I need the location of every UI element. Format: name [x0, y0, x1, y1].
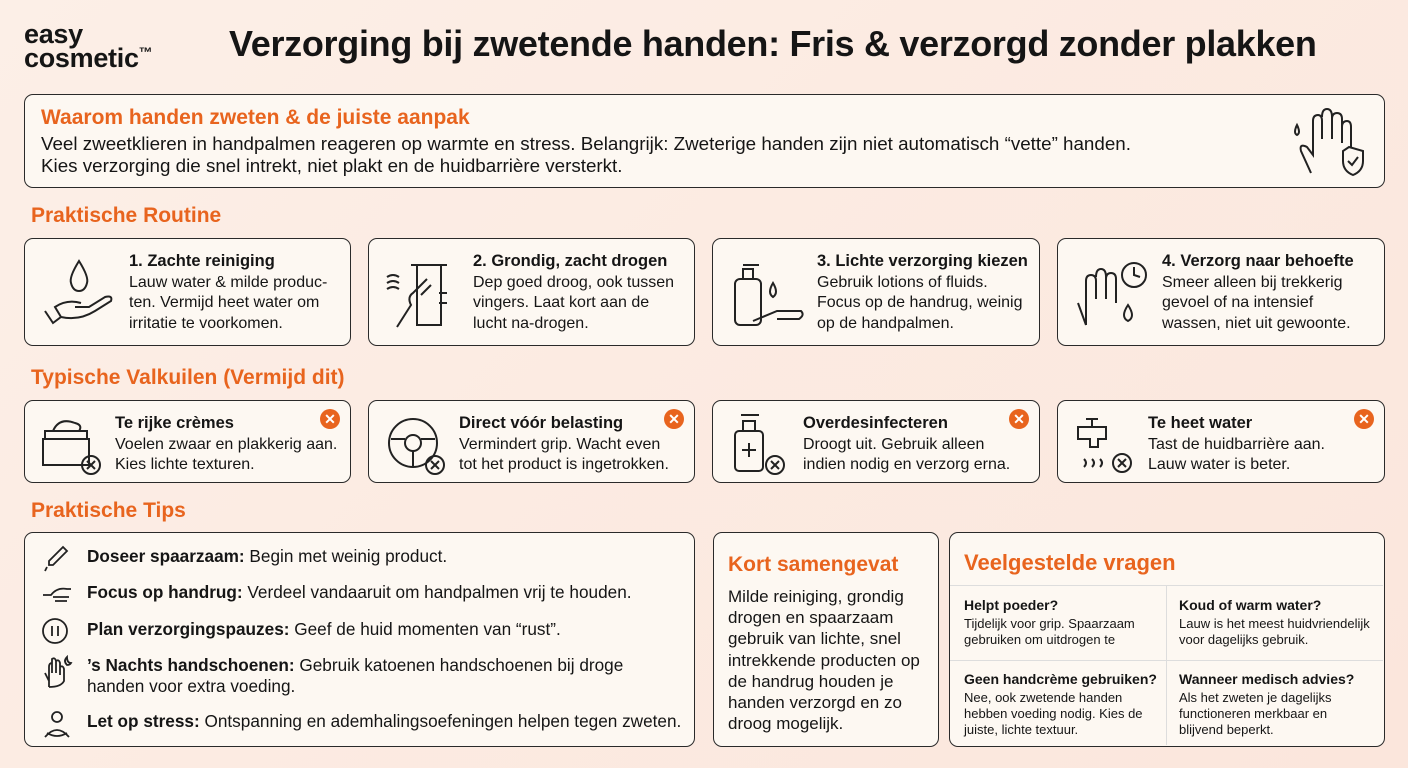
icon: steering wheel — [388, 418, 445, 475]
faq 3: juiste, lichte textuur. — [964, 722, 1078, 737]
text: vingers. Laat kort aan de — [473, 294, 649, 311]
text — [459, 414, 669, 473]
text — [1148, 414, 1325, 473]
faq 3: hebben voeding nodig. Kies de — [964, 706, 1143, 721]
panel: tips: handen voor extra voeding. — [87, 676, 295, 696]
logo: cosmetic™ — [24, 43, 152, 73]
text: Overdesinfecteren — [803, 414, 948, 432]
text — [803, 414, 1010, 473]
icon: x — [1354, 409, 1374, 429]
text — [129, 252, 327, 332]
logo — [24, 19, 152, 73]
panel: tips: Let op stress: Ontspanning en ademhalingsoefeningen helpen tegen zweten. — [87, 711, 681, 731]
faq 4: Als het zweten je dagelijks — [1179, 690, 1331, 705]
faq 2: Koud of warm water? — [1179, 597, 1321, 613]
faq 1: gebruiken om uitdrogen te — [964, 632, 1115, 647]
text: Vermindert grip. Wacht even — [459, 436, 660, 452]
text: Kies lichte texturen. — [115, 456, 255, 473]
text — [817, 252, 1028, 332]
text: ten. Vermijd heet water om — [129, 294, 319, 311]
text: Voelen zwaar en plakkerig aan. — [115, 436, 337, 452]
text: Gebruik lotions of fluids. — [817, 274, 988, 290]
panel: summary — [713, 532, 939, 747]
faq 3: Geen handcrème gebruiken? — [964, 671, 1157, 687]
text: Focus op de handrug, weinig — [817, 294, 1022, 311]
icon: x — [1009, 409, 1029, 429]
heading: tips: Praktische Tips — [31, 499, 186, 522]
intro heading: Waarom handen zweten & de juiste aanpak — [41, 106, 470, 129]
icon: x: ✕ — [1013, 411, 1025, 427]
logo: easy — [24, 19, 83, 49]
faq 4: Wanneer medisch advies? — [1179, 671, 1354, 687]
card: pitfall 3 — [712, 400, 1040, 483]
text: Lauw water is beter. — [1148, 456, 1290, 473]
text — [115, 414, 337, 473]
icon: cream jar — [42, 420, 101, 475]
faq 4: blijvend beperkt. — [1179, 722, 1274, 737]
text: Direct vóór belasting — [459, 414, 623, 432]
panel: faq — [949, 532, 1385, 747]
heading: pitfalls: Typische Valkuilen (Vermijd dit) — [31, 366, 345, 389]
card: routine 4 — [1057, 238, 1385, 346]
tip 1 — [44, 546, 447, 572]
faq 1: Tijdelijk voor grip. Spaarzaam — [964, 616, 1135, 631]
panel: intro — [24, 94, 1385, 188]
heading: routine: Praktische Routine — [31, 204, 221, 227]
icon: x — [320, 409, 340, 429]
faq 2 — [1179, 597, 1370, 647]
icon: hand clock — [1077, 262, 1147, 326]
text: 1. Zachte reiniging — [129, 252, 275, 270]
text: Te rijke crèmes — [115, 414, 234, 432]
text: wassen, niet uit gewoonte. — [1162, 314, 1351, 332]
faq 1 — [964, 597, 1135, 647]
intro text: Veel zweetklieren in handpalmen reageren op warmte en stress. Belangrijk: Zweterige handen zijn niet automatisch “vette” handen. — [41, 133, 1131, 154]
panel: tips: Plan verzorgingspauzes: Geef de huid momenten van “rust”. — [87, 619, 561, 639]
faq heading: Veelgestelde vragen — [964, 550, 1176, 575]
tip 2 — [43, 582, 632, 602]
text: Droogt uit. Gebruik alleen — [803, 436, 984, 452]
intro text: Kies verzorging die snel intrekt, niet plakt en de huidbarrière versterkt. — [41, 155, 622, 176]
text — [1162, 252, 1354, 332]
text: indien nodig en verzorg erna. — [803, 456, 1010, 473]
icon: hand with shield — [1294, 108, 1364, 176]
card: pitfall 2 — [368, 400, 695, 483]
icon: towel — [386, 264, 447, 328]
text: 4. Verzorg naar behoefte — [1162, 252, 1354, 270]
card: routine 3 — [712, 238, 1040, 346]
text: op de handpalmen. — [817, 314, 954, 332]
icon: lotion — [734, 264, 804, 326]
tip 4 — [44, 655, 623, 696]
card: routine 1 — [24, 238, 351, 346]
icon: drop in hand — [44, 259, 112, 324]
card: routine 2 — [368, 238, 695, 346]
panel: tips: ’s Nachts handschoenen: Gebruik katoenen handschoenen bij droge — [87, 655, 623, 675]
icon: x: ✕ — [1358, 411, 1370, 427]
tip 5 — [44, 711, 681, 738]
icon: x — [664, 409, 684, 429]
icon: tap — [1077, 418, 1132, 473]
faq 4: functioneren merkbaar en — [1179, 706, 1327, 721]
text: tot het product is ingetrokken. — [459, 456, 669, 473]
panel: tips: Focus op handrug: Verdeel vandaaruit om handpalmen vrij te houden. — [87, 582, 632, 602]
text: Tast de huidbarrière aan. — [1148, 436, 1325, 452]
icon: x: ✕ — [324, 411, 336, 427]
panel: tips — [24, 532, 695, 747]
faq 1: Helpt poeder? — [964, 597, 1058, 613]
card: pitfall 1 — [24, 400, 351, 483]
text: 3. Lichte verzorging kiezen — [817, 252, 1028, 270]
text: gevoel of na intensief — [1162, 294, 1313, 311]
faq 2: Lauw is het meest huidvriendelijk — [1179, 616, 1370, 631]
text: Te heet water — [1148, 414, 1252, 432]
text: 2. Grondig, zacht drogen — [473, 252, 667, 270]
icon: disinfectant — [734, 414, 785, 475]
card: pitfall 4 — [1057, 400, 1385, 483]
faq 3 — [964, 671, 1157, 737]
tip 3 — [42, 618, 561, 644]
summary heading: Kort samengevat — [728, 553, 898, 576]
faq 2: voor dagelijks gebruik. — [1179, 632, 1308, 647]
faq 3: Nee, ook zwetende handen — [964, 690, 1122, 705]
text: Dep goed droog, ook tussen — [473, 274, 674, 290]
text: Smeer alleen bij trekkerig — [1162, 274, 1343, 290]
faq 4 — [1179, 671, 1354, 737]
title: Verzorging bij zwetende handen: Fris & verzorgd zonder plakken — [229, 23, 1317, 64]
intro text — [41, 133, 1131, 176]
panel: tips: Doseer spaarzaam: Begin met weinig product. — [87, 546, 447, 566]
text: Lauw water & milde produc- — [129, 274, 327, 290]
summary text: Milde reiniging, grondig drogen en spaarzaam gebruik van lichte, snel intrekkende producten op de handrug houden je handen verzorgd en zo droog mogelijk. — [728, 587, 920, 733]
text — [473, 252, 674, 332]
text: lucht na-drogen. — [473, 314, 589, 332]
icon: x: ✕ — [668, 411, 680, 427]
text: irritatie te voorkomen. — [129, 314, 283, 332]
